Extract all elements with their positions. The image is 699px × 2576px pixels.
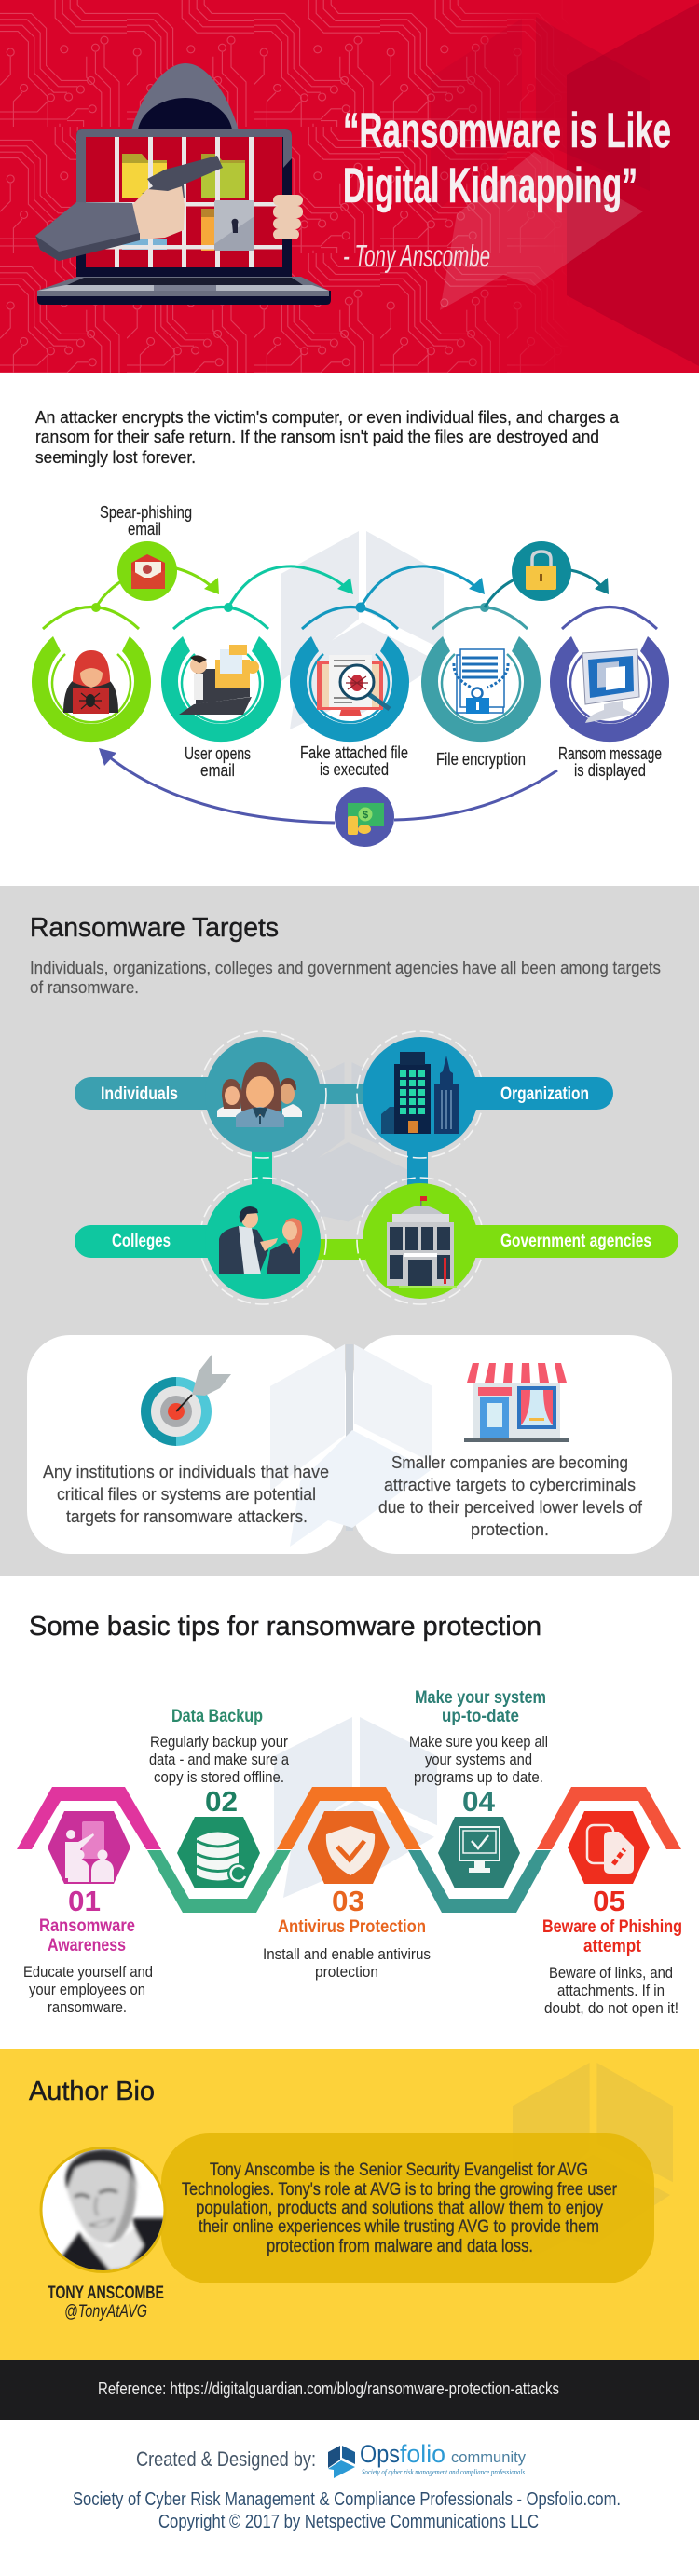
- icon: padlock badge: [512, 541, 571, 601]
- icon: people: [217, 1062, 302, 1127]
- tip 3: antivirus protection: [263, 1811, 431, 1981]
- body: data - and make sure a: [149, 1751, 289, 1768]
- bio text: Technologies. Tony's role at AVG is to bring the growing free user: [182, 2180, 618, 2200]
- body: [409, 1733, 548, 1786]
- labels: cycle steps: [100, 503, 662, 780]
- icon: office towers: [381, 1052, 459, 1134]
- panel: ransomware attack cycle diagram: [32, 503, 669, 847]
- text: critical files or systems are potential: [57, 1484, 316, 1504]
- title quote: [343, 103, 671, 213]
- created by label: Created & Designed by:: [136, 2447, 316, 2471]
- title: Antivirus Protection: [278, 1917, 426, 1937]
- laptop base: [37, 291, 331, 305]
- hexagon icon: presentation: [48, 1811, 130, 1884]
- logo: Opsfolio community: community: [451, 2448, 526, 2466]
- label: Colleges: [112, 1232, 171, 1251]
- text: [378, 1452, 643, 1539]
- labels: cycle steps: User opens: [185, 744, 251, 763]
- number: 05: [593, 1885, 625, 1917]
- target: colleges: [75, 1183, 321, 1299]
- description: [30, 959, 661, 997]
- arrow: encryption to ransom message: [485, 570, 609, 607]
- hexagon icon: linked documents: [568, 1811, 650, 1884]
- laptop lid: [76, 129, 292, 277]
- description: Individuals, organizations, colleges and government agencies have all been among targets: [30, 959, 661, 977]
- text: Any institutions or individuals that have: [43, 1462, 329, 1481]
- description: of ransomware.: [30, 978, 139, 997]
- body: Educate yourself and: [23, 1963, 153, 1981]
- text block: introduction: [35, 408, 620, 467]
- title: [542, 1917, 682, 1956]
- icon: money badge: [335, 787, 394, 847]
- labels: cycle steps: email: [200, 761, 235, 780]
- panel: protection tips: [17, 1612, 682, 2017]
- body: [23, 1963, 153, 2016]
- text: [43, 1462, 329, 1526]
- step: ransom message: [550, 607, 669, 742]
- body: copy is stored offline.: [154, 1768, 284, 1786]
- watermark on cards: [270, 1344, 432, 1547]
- logo: Opsfolio community: Society of cyber risk management and compliance professionals: [362, 2468, 525, 2476]
- labels: cycle steps: File encryption: [436, 750, 526, 769]
- icon: laptop with email: [179, 645, 259, 715]
- bio text: Tony Anscombe is the Senior Security Evangelist for AVG: [210, 2160, 588, 2180]
- text block: introduction: An attacker encrypts the victim's computer, or even individual files, and charges a: [35, 408, 620, 427]
- target: government agencies: [363, 1183, 678, 1299]
- quote attribution: - Tony Anscombe: [343, 239, 490, 273]
- icon: hooded hacker: [63, 650, 118, 714]
- label: Individuals: [101, 1084, 178, 1104]
- body: programs up to date.: [414, 1768, 543, 1786]
- card backgrounds: [27, 1335, 672, 1554]
- labels: cycle steps: email: [128, 520, 161, 538]
- labels: cycle steps: Spear-phishing: [100, 503, 192, 522]
- connectors: [252, 1084, 428, 1260]
- number: 04: [462, 1785, 496, 1818]
- step: fake file executed: [290, 602, 409, 742]
- label: Government agencies: [500, 1232, 651, 1251]
- labels: cycle steps: Fake attached file: [300, 743, 408, 762]
- number: 02: [205, 1785, 238, 1818]
- label: Organization: [500, 1084, 589, 1104]
- bio text: population, products and solutions that allow them to enjoy: [196, 2199, 603, 2218]
- panel: reference bar: [0, 2360, 699, 2420]
- icon: chained document with padlock: [454, 649, 508, 714]
- panel: reference bar: Reference: https://digitalguardian.com/blog/ransomware-protection-attacks: [98, 2379, 559, 2398]
- padlock plate: [214, 200, 254, 251]
- bio text: protection from malware and data loss.: [267, 2237, 533, 2256]
- body: Regularly backup your: [150, 1733, 288, 1751]
- title: [415, 1688, 546, 1726]
- icon: phishing envelope badge: [117, 541, 177, 601]
- hexagon icon: database: [177, 1817, 260, 1888]
- text: Smaller companies are becoming: [391, 1452, 628, 1472]
- logo: Opsfolio community: Ops: [360, 2440, 400, 2468]
- card: institutions: [43, 1355, 329, 1526]
- fingers on bars: [273, 195, 303, 239]
- tip 5: phishing: [542, 1811, 682, 2017]
- tip 2: data backup: [149, 1707, 289, 1888]
- heading: Some basic tips for ransomware protection: [29, 1612, 541, 1642]
- labels: cycle steps: Ransom message: [558, 744, 662, 763]
- heading: Author Bio: [29, 2077, 155, 2106]
- sleeve: [35, 202, 140, 261]
- icon: computer with ransom windows: [582, 649, 639, 723]
- text: due to their perceived lower levels of: [378, 1497, 643, 1517]
- icon: two people talking: [219, 1206, 302, 1274]
- logo: Opsfolio community: [328, 2440, 526, 2478]
- logo: Opsfolio community: folio: [400, 2440, 445, 2468]
- hood: [131, 63, 239, 130]
- arrow: attacker to user: [96, 568, 219, 607]
- tip 4: up to date: [409, 1688, 548, 1888]
- text: attractive targets to cybercriminals: [384, 1475, 636, 1494]
- text block: introduction: ransom for their safe return. If the ransom isn't paid the files are destroyed and: [35, 428, 599, 446]
- text: targets for ransomware attackers.: [66, 1506, 308, 1526]
- arrow: file to encryption: [361, 566, 485, 607]
- icon: storefront: [464, 1363, 569, 1442]
- icon: government building: [387, 1196, 457, 1288]
- step: file encryption: [421, 603, 541, 742]
- icon: money badge: $: [363, 810, 368, 821]
- step: user opens email: [161, 603, 281, 742]
- tip 1: ransomware awareness: [23, 1811, 153, 2016]
- target: organization: [363, 1037, 613, 1152]
- panel: credits footer: [73, 2440, 621, 2532]
- target: individuals: [75, 1037, 321, 1152]
- gun: [142, 156, 223, 198]
- heading: Ransomware Targets: [30, 913, 279, 943]
- arrow: payment back to attacker: [99, 748, 557, 823]
- panel: author bio: [0, 2049, 699, 2360]
- photo: Tony Anscombe: [39, 2147, 168, 2283]
- body: attachments. If in: [557, 1982, 665, 1999]
- copyright line: Copyright © 2017 by Netspective Communications LLC: [158, 2512, 539, 2532]
- title: Make your system: [415, 1688, 546, 1708]
- hand: [132, 186, 185, 239]
- card: smaller companies: [378, 1363, 643, 1539]
- body: Install and enable antivirus: [263, 1945, 431, 1963]
- author name: TONY ANSCOMBE: [48, 2283, 164, 2303]
- icon: bug under magnifier: [317, 655, 390, 716]
- title: Ransomware: [39, 1916, 135, 1936]
- bio text: [182, 2160, 618, 2256]
- body: doubt, do not open it!: [544, 1999, 678, 2017]
- body: ransomware.: [48, 1998, 127, 2016]
- body: your systems and: [425, 1751, 532, 1768]
- text: protection.: [471, 1520, 549, 1539]
- number: 03: [332, 1885, 364, 1917]
- folders: [122, 154, 167, 198]
- body: Make sure you keep all: [409, 1733, 548, 1751]
- jail bars: [86, 137, 282, 267]
- bio pill: [161, 2133, 654, 2283]
- number: 01: [68, 1885, 101, 1917]
- title: Data Backup: [171, 1707, 263, 1726]
- title: up-to-date: [442, 1707, 519, 1726]
- step: attacker: [32, 603, 151, 742]
- labels: cycle steps: is executed: [320, 760, 389, 779]
- panel: ransomware targets: [0, 886, 699, 1576]
- body: [544, 1964, 678, 2017]
- title: attempt: [583, 1937, 642, 1956]
- body: Beware of links, and: [549, 1964, 673, 1982]
- title: Awareness: [48, 1936, 126, 1956]
- hexagon icon: monitor: [438, 1817, 520, 1888]
- illustration: hacker behind locked laptop: [35, 63, 331, 305]
- labels: cycle steps: is displayed: [574, 761, 646, 780]
- zigzag band: [17, 1787, 681, 1913]
- body: protection: [315, 1963, 378, 1981]
- body: [149, 1733, 289, 1786]
- body: your employees on: [29, 1981, 145, 1998]
- body: [263, 1945, 431, 1981]
- author handle: @TonyAtAVG: [64, 2302, 147, 2322]
- arrow: user to attached file: [228, 566, 353, 607]
- panel: header banner: [0, 0, 699, 373]
- icon: target with arrow: [141, 1355, 231, 1446]
- hexagon icon: shield: [308, 1811, 390, 1884]
- text block: introduction: seemingly lost forever.: [35, 448, 196, 467]
- dashed rings: [199, 1031, 484, 1304]
- bio text: their online experiences while trusting AVG to provide them: [199, 2217, 599, 2237]
- title: [39, 1916, 135, 1956]
